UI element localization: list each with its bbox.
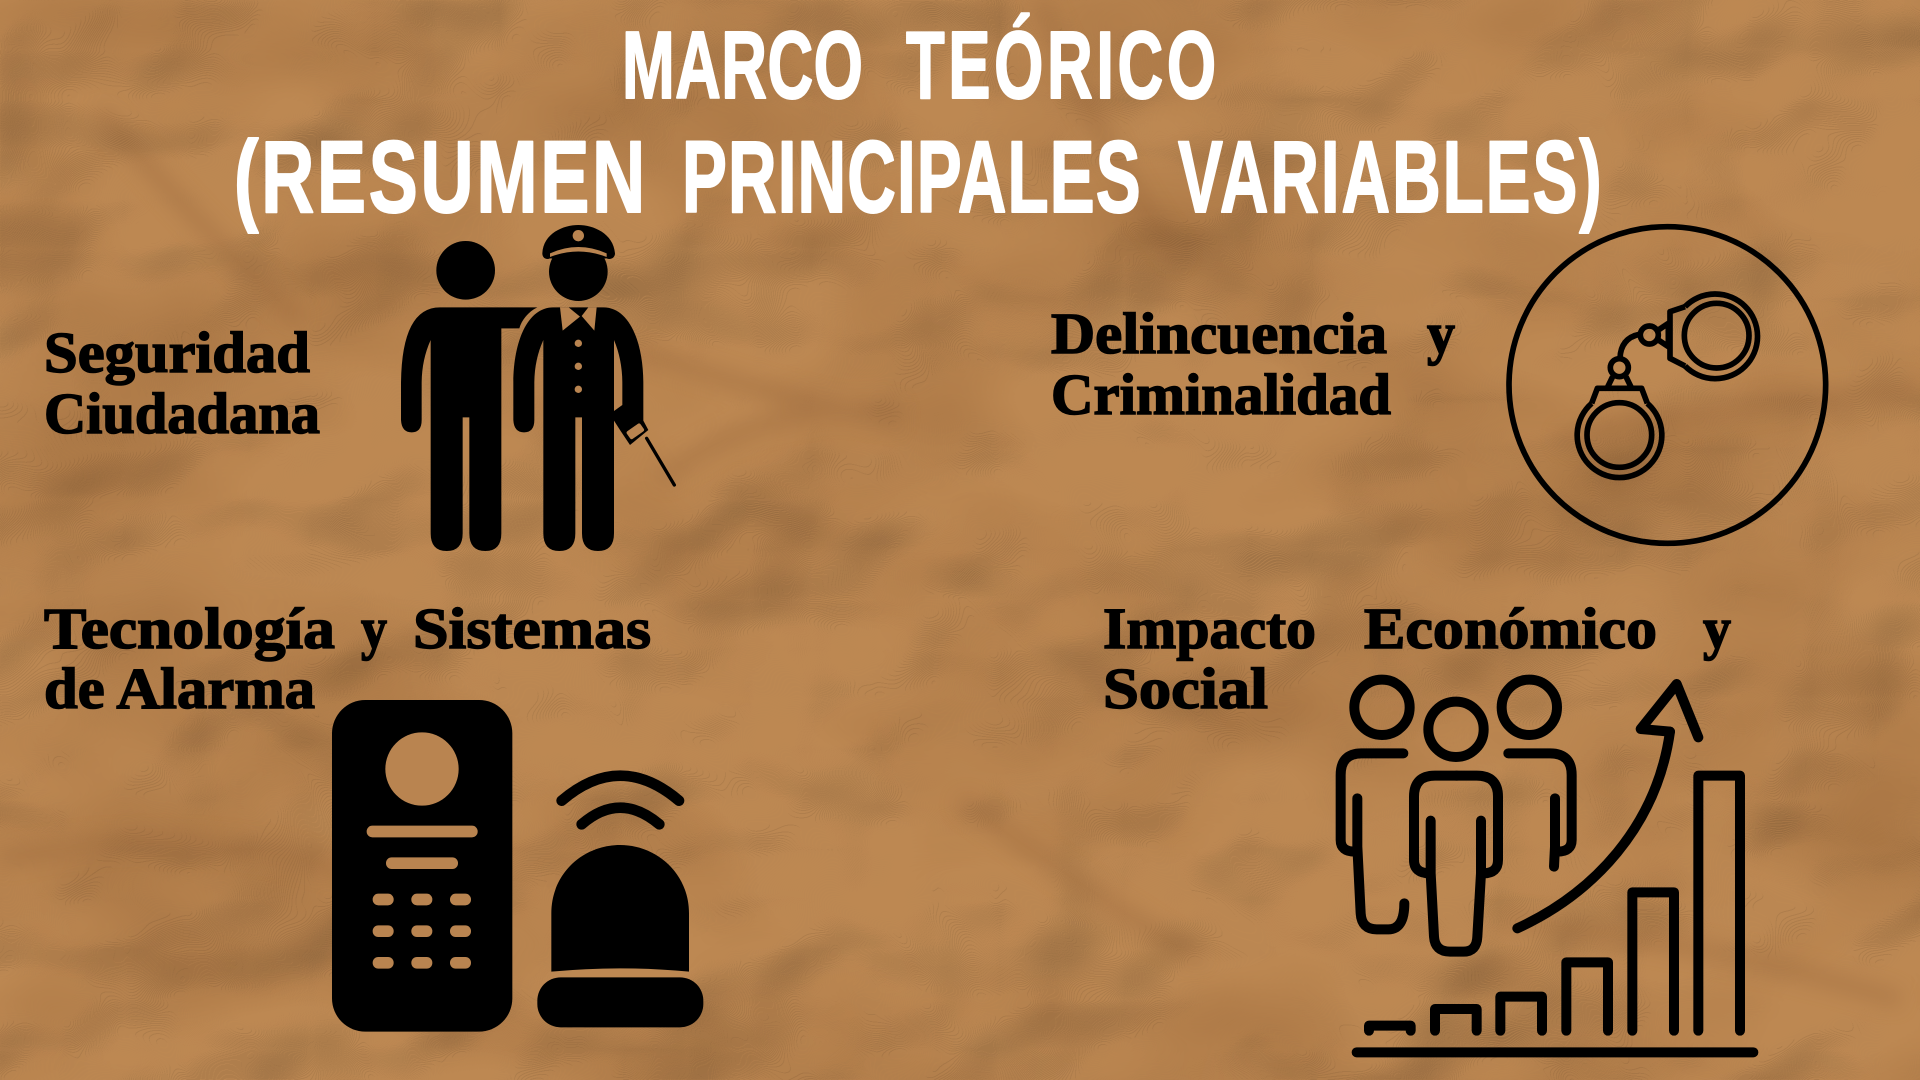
heading: Delincuencia y Criminalidad: Delincuencia bbox=[1051, 301, 1387, 366]
heading: Seguridad Ciudadana: Seguridad bbox=[44, 320, 310, 385]
heading: Impacto Económico y Social: Social bbox=[1103, 656, 1268, 721]
icon: handcuffs in circle bbox=[1509, 227, 1826, 543]
title bbox=[234, 12, 1602, 234]
heading: Impacto Económico y Social: y bbox=[1703, 596, 1731, 661]
heading: Tecnología y Sistemas de Alarma: y bbox=[361, 596, 387, 661]
heading: Tecnología y Sistemas de Alarma: de Alarma bbox=[44, 656, 315, 721]
title: MARCO bbox=[622, 12, 863, 119]
title: TEÓRICO bbox=[906, 12, 1216, 119]
title: (RESUMEN bbox=[234, 120, 645, 234]
heading: Impacto Económico y Social: Impacto bbox=[1103, 596, 1316, 661]
heading: Delincuencia y Criminalidad: y bbox=[1427, 301, 1455, 366]
heading: Tecnología y Sistemas de Alarma: Tecnología bbox=[44, 596, 335, 661]
heading: Delincuencia y Criminalidad bbox=[1051, 301, 1455, 427]
heading: Tecnología y Sistemas de Alarma: Sistemas bbox=[413, 596, 651, 661]
icon: alarm keypad and siren bbox=[332, 700, 703, 1032]
icon: citizen and police officer bbox=[401, 225, 674, 551]
heading: Seguridad Ciudadana bbox=[44, 320, 320, 446]
heading: Impacto Económico y Social bbox=[1103, 596, 1731, 721]
title: VARIABLES) bbox=[1178, 121, 1602, 234]
icon: people with growth chart bbox=[1341, 680, 1753, 1052]
heading: Impacto Económico y Social: Económico bbox=[1364, 596, 1657, 661]
heading: Seguridad Ciudadana: Ciudadana bbox=[44, 381, 320, 446]
title: PRINCIPALES bbox=[682, 121, 1141, 234]
heading: Delincuencia y Criminalidad: Criminalidad bbox=[1051, 362, 1391, 427]
heading: Tecnología y Sistemas de Alarma bbox=[44, 596, 651, 721]
